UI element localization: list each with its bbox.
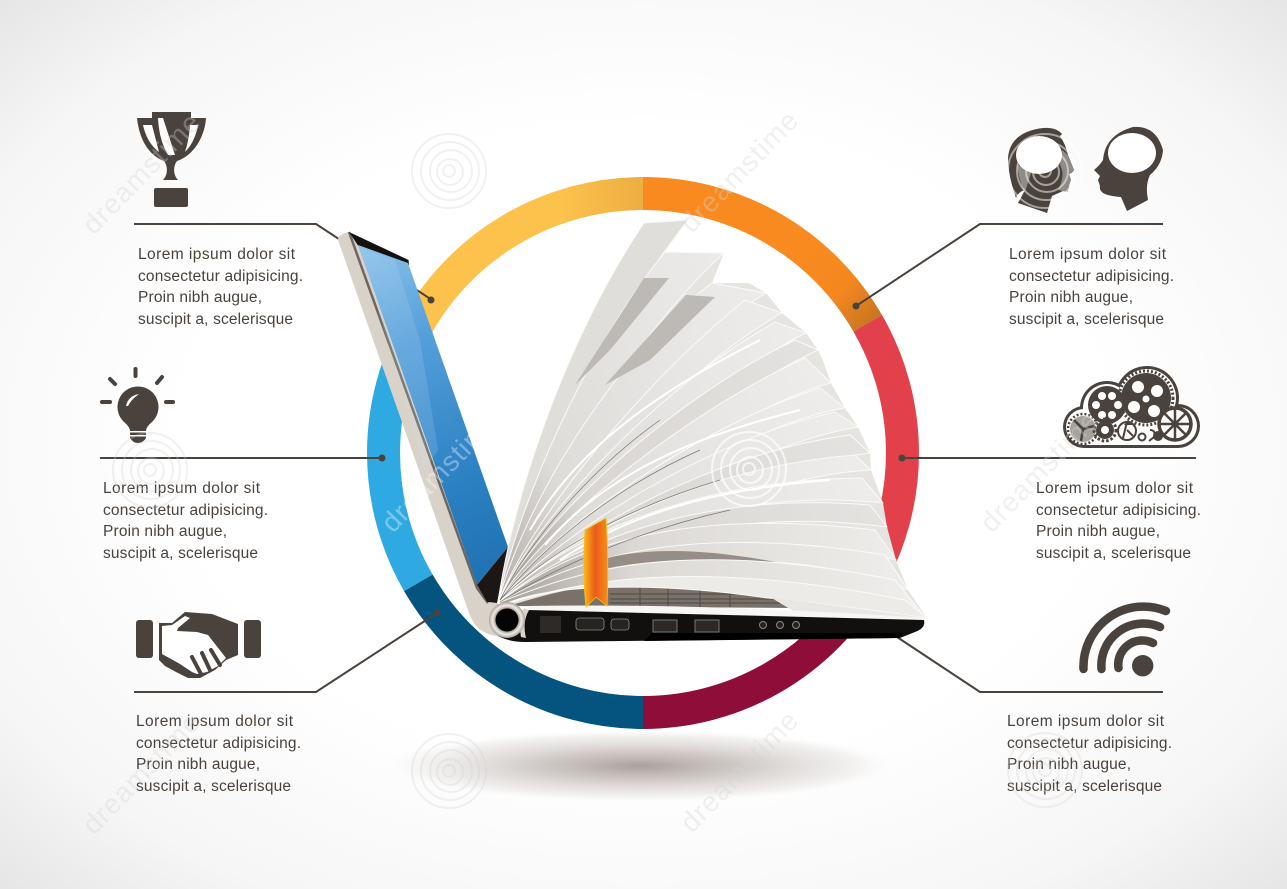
icon: wifi	[1083, 607, 1166, 676]
icon: handshake	[136, 612, 261, 678]
hands	[159, 612, 238, 678]
hinge ring	[489, 602, 525, 638]
hdmi port	[576, 618, 604, 630]
text block: middle right: Lorem ipsum dolor sit	[1036, 480, 1194, 497]
screen	[358, 245, 508, 585]
lid back shell	[338, 232, 522, 637]
laptop lid	[338, 232, 522, 637]
laptop hinge	[489, 602, 525, 638]
trophy slits	[143, 118, 198, 155]
base white strip	[527, 606, 927, 621]
text block: middle right: Proin nibh augue,	[1036, 523, 1160, 540]
base lower dark band	[644, 633, 905, 641]
page gap filler	[770, 597, 927, 618]
connector: bottom right	[897, 637, 1163, 692]
connector: top left	[134, 224, 432, 300]
text block: top left: Lorem ipsum dolor sit	[138, 246, 296, 263]
page 1	[498, 220, 688, 604]
text block: middle right	[1036, 480, 1201, 562]
text block: bottom right: Proin nibh augue,	[1007, 756, 1131, 773]
bulb rays	[102, 369, 173, 402]
text block: bottom left: consectetur adipisicing.	[136, 735, 301, 752]
text block: bottom left: suscipit a, scelerisque	[136, 778, 291, 795]
text block: bottom right: Lorem ipsum dolor sit	[1007, 713, 1165, 730]
page fold lines	[500, 340, 830, 602]
finger lines	[192, 650, 220, 674]
icon: trophy	[137, 112, 206, 207]
lower left gear	[1068, 414, 1098, 444]
bookmark ribbon	[584, 518, 608, 607]
text block: top left: Proin nibh augue,	[138, 289, 262, 306]
watermark text: dreamstime	[674, 704, 805, 838]
floor shadow	[378, 729, 902, 803]
connector: middle left	[100, 457, 383, 459]
watermark text: dreamstime	[76, 706, 207, 840]
right head brain space	[1108, 133, 1156, 173]
page 5	[498, 322, 806, 604]
brown page shadow	[600, 551, 790, 570]
text block: bottom left	[136, 713, 301, 795]
text block: top right: suscipit a, scelerisque	[1009, 311, 1164, 328]
ethernet port	[540, 616, 561, 633]
left wheel	[1088, 386, 1126, 424]
page 14	[498, 523, 896, 604]
text block: middle left	[103, 480, 268, 562]
ring segment: orange	[643, 194, 868, 323]
watermark text: dreamstime	[974, 404, 1105, 538]
text block: top right: Proin nibh augue,	[1009, 289, 1133, 306]
watermark text: dreamstime	[674, 104, 805, 238]
ring segment: dark blue	[418, 583, 643, 712]
page 15	[498, 542, 908, 604]
hinge cover	[520, 608, 529, 638]
text block: middle left: Proin nibh augue,	[103, 523, 227, 540]
wifi dot	[1132, 655, 1153, 676]
book silhouette	[498, 220, 927, 618]
ring segment: red	[868, 323, 902, 583]
page shadow stripe 2	[605, 295, 715, 385]
left head brain space	[1016, 136, 1062, 174]
text block: middle left: suscipit a, scelerisque	[103, 545, 258, 562]
left head grey tint back	[1017, 165, 1032, 192]
keyboard key rows	[610, 588, 785, 607]
right wheel	[1159, 408, 1191, 440]
watermark spirals	[113, 134, 1082, 808]
page 12	[498, 478, 883, 604]
large gear	[1119, 371, 1173, 425]
page 13	[498, 503, 887, 604]
page 7	[498, 358, 831, 604]
text block: bottom left: Proin nibh augue,	[136, 756, 260, 773]
bulb highlight	[126, 394, 139, 406]
bulb glass	[117, 386, 159, 431]
lid edge line	[349, 232, 488, 603]
left head	[1008, 128, 1074, 213]
watermark text: dreamstime	[76, 106, 207, 240]
text block: middle right: suscipit a, scelerisque	[1036, 545, 1191, 562]
bottom page	[505, 576, 927, 618]
ring segment: light blue	[384, 323, 418, 583]
bulb screw cap	[130, 432, 146, 443]
watermark text: dreamstime	[375, 404, 506, 538]
text block: middle left: Lorem ipsum dolor sit	[103, 480, 261, 497]
watermark text	[76, 104, 1105, 840]
cloud interior	[1066, 369, 1197, 445]
text block: top right	[1009, 246, 1174, 328]
left head grey tint face	[1058, 150, 1074, 192]
right cuff	[244, 620, 261, 658]
ring segment: crimson	[643, 583, 868, 712]
screen bezel top	[349, 232, 409, 265]
keyboard deck	[508, 580, 795, 608]
usb port 2	[695, 620, 719, 632]
colour ring	[384, 194, 902, 712]
connector lines	[100, 224, 1196, 692]
text block: top right: consectetur adipisicing.	[1009, 268, 1174, 285]
page 4	[498, 300, 782, 604]
icon: cloud of gears	[1063, 366, 1200, 448]
audio jacks	[760, 622, 800, 628]
text block: top left	[138, 246, 303, 328]
icon: heads	[1008, 127, 1163, 213]
right head	[1094, 127, 1163, 211]
cloud outline	[1063, 366, 1200, 448]
text block: bottom right: suscipit a, scelerisque	[1007, 778, 1162, 795]
ring segment: yellow	[418, 194, 643, 323]
tiny mechanisms	[1118, 422, 1162, 441]
page 16	[498, 560, 925, 617]
page 11	[498, 455, 871, 604]
page 8	[498, 388, 845, 604]
text block: bottom left: Lorem ipsum dolor sit	[136, 713, 294, 730]
hinge hole	[496, 608, 518, 632]
white hand	[162, 616, 226, 674]
screen highlight	[360, 248, 438, 470]
page 10	[498, 435, 870, 604]
screen black corner	[477, 547, 508, 603]
usb port 1	[653, 620, 677, 632]
text block: bottom right: consectetur adipisicing.	[1007, 735, 1172, 752]
open book pages	[498, 220, 927, 618]
base body	[498, 610, 924, 642]
left cuff	[136, 620, 153, 658]
keyboard	[508, 580, 795, 608]
text block: top left: consectetur adipisicing.	[138, 268, 303, 285]
connector dots	[378, 296, 906, 616]
text block: top left: suscipit a, scelerisque	[138, 311, 293, 328]
text block: middle left: consectetur adipisicing.	[103, 502, 268, 519]
page 2	[498, 252, 724, 604]
trophy base	[154, 188, 188, 207]
connector: top right	[856, 224, 1163, 306]
small gear	[1094, 419, 1116, 441]
connector: bottom left	[134, 613, 437, 692]
page 6	[498, 340, 818, 604]
text block: bottom right	[1007, 713, 1172, 795]
text block: top right: Lorem ipsum dolor sit	[1009, 246, 1167, 263]
laptop base	[498, 606, 927, 642]
page 3	[498, 283, 766, 604]
page 9	[498, 412, 858, 604]
text block: middle right: consectetur adipisicing.	[1036, 502, 1201, 519]
icon: light bulb	[102, 369, 173, 443]
mini port	[611, 619, 629, 630]
connector: middle right	[902, 457, 1196, 459]
page shadow stripe 1	[575, 278, 669, 385]
